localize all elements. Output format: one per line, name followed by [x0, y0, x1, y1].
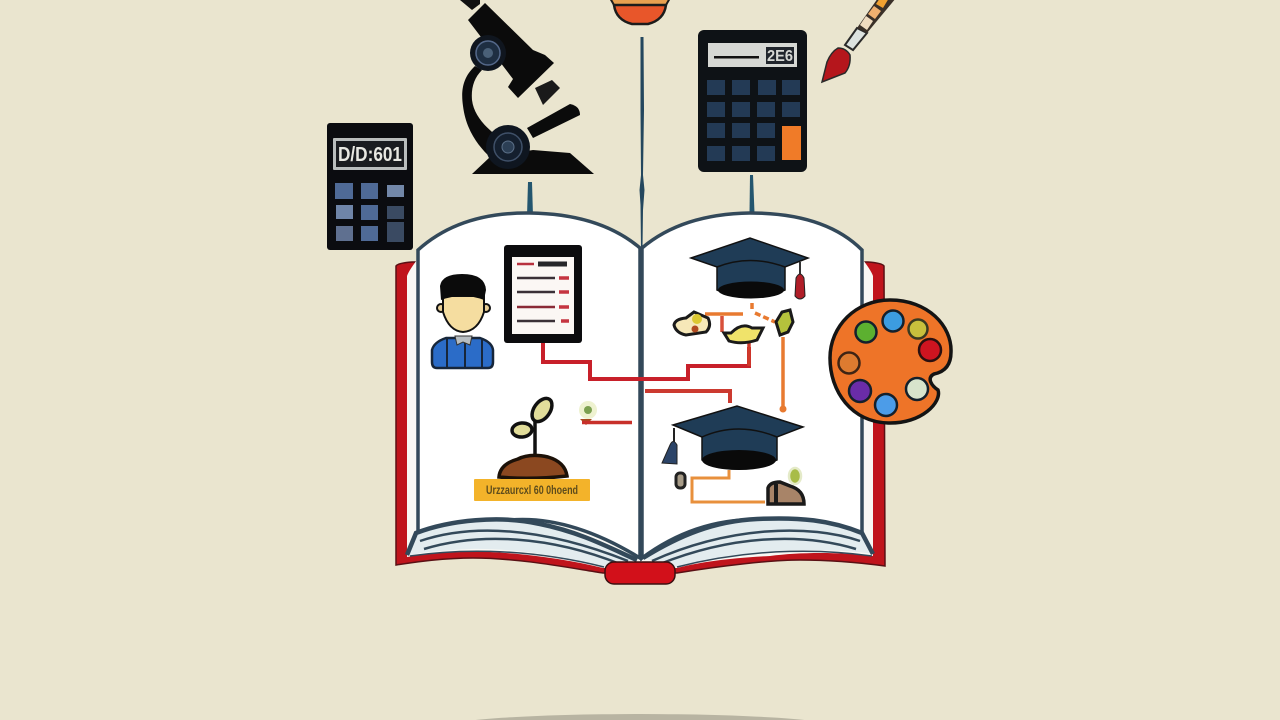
connector: microscope to book: [527, 182, 533, 216]
icon: paint brush: [822, 0, 896, 82]
left page: [418, 213, 640, 558]
right page stack: [643, 518, 873, 567]
small sprout connector: [579, 401, 632, 425]
icon: upper graduation cap: [691, 238, 808, 299]
display digits: D/D:601: [338, 144, 402, 166]
book cover: [396, 262, 885, 573]
icon: large calculator: [698, 30, 807, 172]
book: [396, 213, 885, 584]
yellow label: [474, 479, 590, 501]
icon: brown bag: [768, 482, 804, 504]
orange arrow tip: [780, 406, 786, 412]
icon: small capsule: [676, 473, 685, 488]
icon: lamp base at top: [610, 0, 670, 24]
yellow label: Urzzaurcxl 60 0hoend: [486, 485, 578, 497]
orange connector: lower hat to bag: [692, 470, 765, 502]
left page stack: [407, 519, 637, 567]
icon: seedling on soil: [499, 395, 567, 478]
icon: green coin: [789, 468, 801, 484]
icon: microscope: [460, 0, 594, 174]
inner page edges: [407, 256, 873, 568]
icon: lower graduation cap: [662, 406, 803, 470]
icon: right leaf cluster: [776, 310, 793, 335]
red connector: to lower hat: [645, 391, 730, 403]
right page: [642, 213, 862, 558]
display number: 2E6: [767, 48, 793, 65]
connector: calculator to book: [750, 175, 754, 213]
central vertical line: [640, 37, 644, 248]
icon: student avatar: [432, 274, 493, 368]
book clasp: [605, 562, 675, 584]
red connector: clipboard to hat: [543, 343, 749, 379]
icon: clipboard list: [504, 245, 582, 343]
icon: small calculator: [327, 123, 413, 250]
orange connector network: [705, 303, 783, 406]
icon: middle dish: [724, 326, 763, 343]
icon: paint palette: [830, 300, 951, 423]
icon: left food cluster: [674, 312, 710, 335]
floor shadow: [445, 714, 835, 720]
